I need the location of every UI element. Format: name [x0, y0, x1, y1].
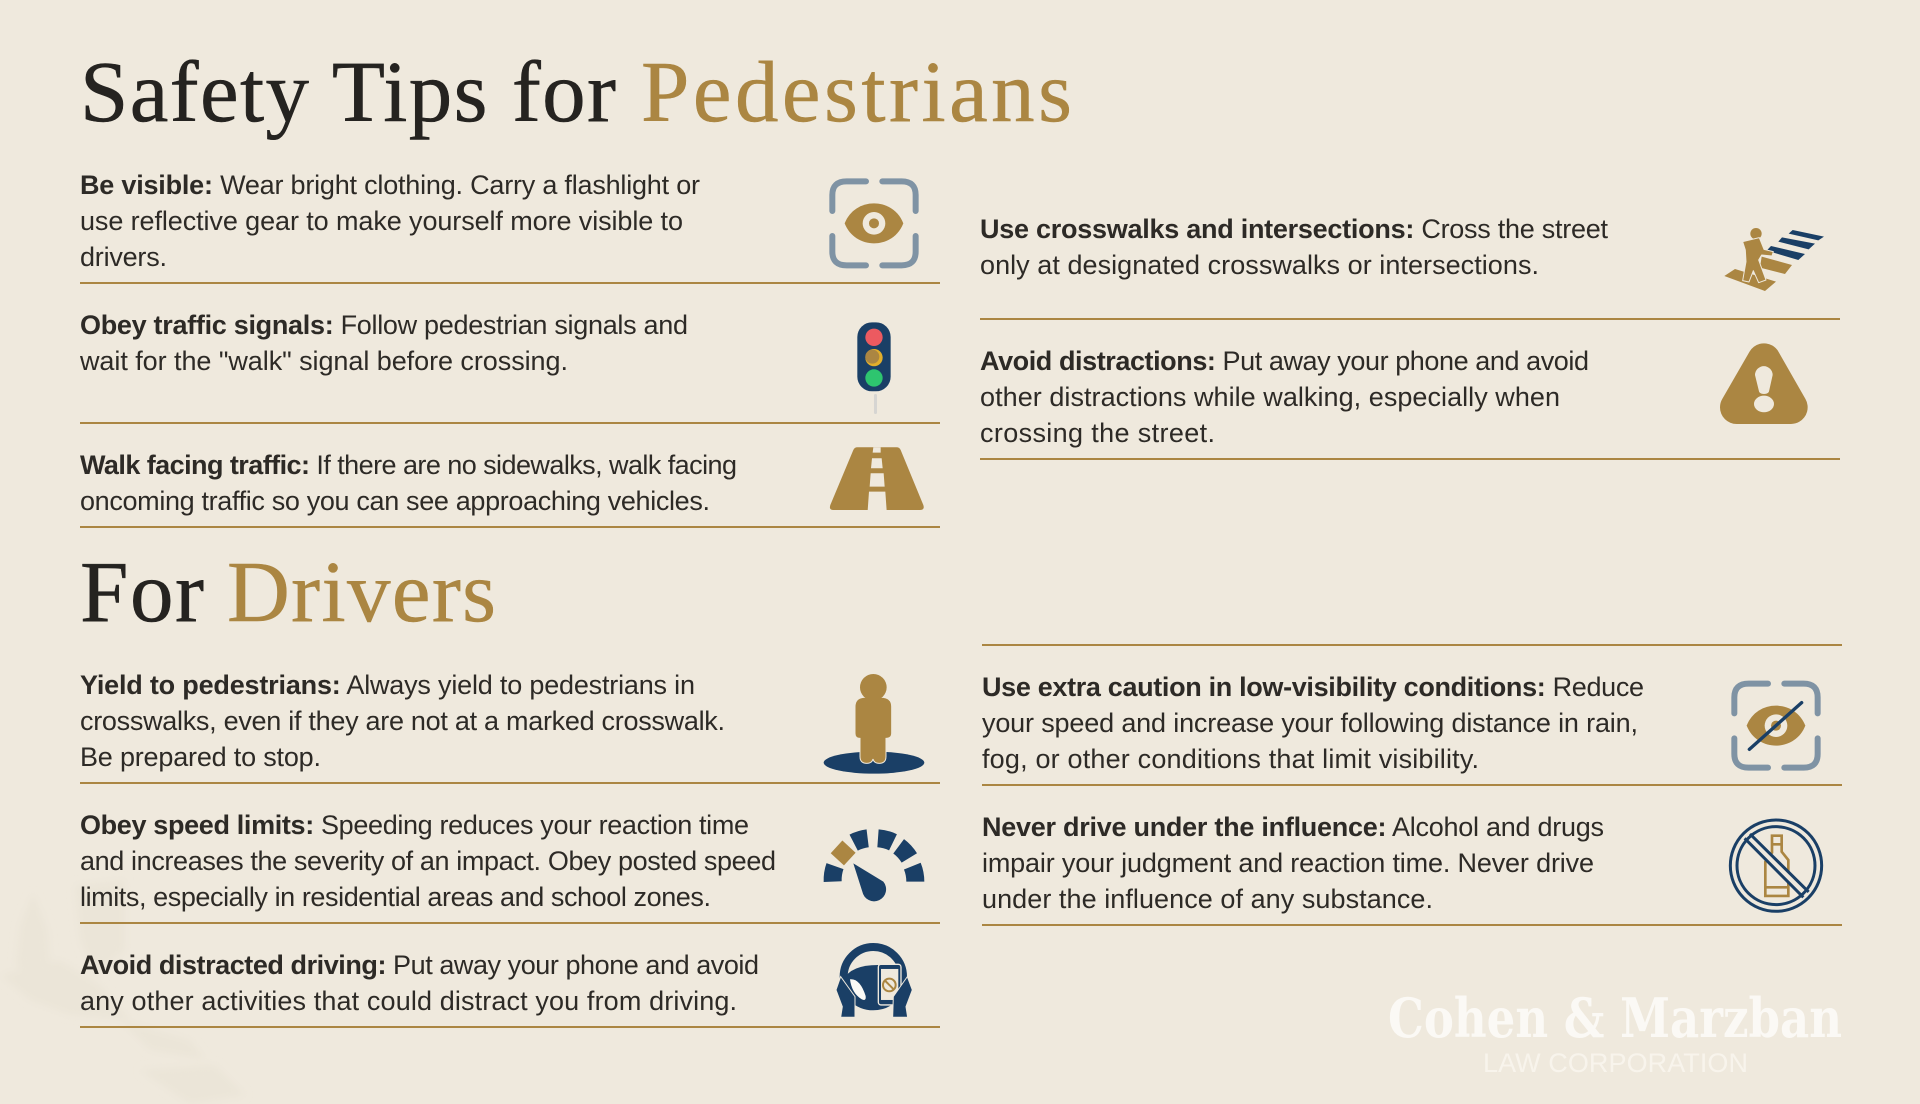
panel: avoid distracted driving: Avoid distracted driving: Put away your phone and avoid	[80, 950, 759, 980]
panel: never drive under the influence: under the influence of any substance.	[982, 884, 1433, 914]
panel: use crosswalks: only at designated crosswalks or intersections.	[980, 250, 1539, 280]
panel: walk facing traffic: oncoming traffic so you can see approaching vehicles.	[80, 486, 710, 516]
icon: crossed-out eye	[1734, 684, 1818, 768]
icon: eye in focus frame	[832, 181, 916, 265]
panel: obey speed limits: Obey speed limits: Speeding reduces your reaction time	[80, 810, 749, 840]
icon: speedometer	[833, 838, 915, 901]
icon: road	[830, 447, 924, 511]
icon: no alcohol sign	[1730, 820, 1822, 911]
logo: Cohen and Marzban Law Corporation: Cohen & Marzban	[1388, 986, 1842, 1050]
panel: low-visibility conditions: your speed and increase your following distance in rain,	[982, 708, 1638, 738]
panel: low-visibility conditions: fog, or other conditions that limit visibility.	[982, 744, 1479, 774]
panel: never drive under the influence: Never drive under the influence: Alcohol and drugs	[982, 812, 1604, 842]
panel: be visible: drivers.	[80, 242, 167, 272]
panel: yield to pedestrians: crosswalks, even if they are not at a marked crosswalk.	[80, 706, 725, 736]
icon: steering wheel with phone	[836, 947, 912, 1017]
logo: Cohen and Marzban Law Corporation	[1388, 986, 1842, 1078]
panel: never drive under the influence	[982, 812, 1842, 925]
panel: walk facing traffic	[80, 447, 940, 527]
panel: avoid distracted driving: any other activities that could distract you from driving.	[80, 986, 737, 1016]
panel: obey traffic signals: Obey traffic signals: Follow pedestrian signals and	[80, 310, 688, 340]
icon: pedestrian on crosswalk	[1724, 228, 1824, 291]
panel: yield to pedestrians	[80, 670, 940, 783]
icon: warning triangle	[1737, 360, 1791, 412]
watermark: faint tree and hillside	[0, 880, 245, 1104]
panel: avoid distractions: Avoid distractions: Put away your phone and avoid	[980, 346, 1589, 376]
panel: be visible: Be visible: Wear bright clothing. Carry a flashlight or	[80, 170, 700, 200]
panel: obey speed limits: and increases the severity of an impact. Obey posted speed	[80, 846, 776, 876]
heading: For Drivers	[80, 543, 496, 640]
icon: person standing	[824, 674, 924, 774]
panel: avoid distractions: crossing the street.	[980, 418, 1215, 448]
panel: avoid distracted driving	[80, 947, 940, 1027]
panel: be visible	[80, 170, 940, 283]
title: Safety Tips for Pedestrians	[80, 43, 1072, 140]
panel: low-visibility conditions: Use extra caution in low-visibility conditions: Reduce	[982, 672, 1644, 702]
panel: obey traffic signals: wait for the "walk" signal before crossing.	[79, 346, 568, 376]
title: Safety Tips for Pedestrians: Safety Tips for	[80, 43, 616, 140]
heading: For Drivers: Drivers	[227, 543, 496, 640]
panel: yield to pedestrians: Yield to pedestrians: Always yield to pedestrians in	[80, 670, 695, 700]
logo: Cohen and Marzban Law Corporation: LAW CORPORATION	[1483, 1048, 1748, 1078]
panel: yield to pedestrians: Be prepared to stop.	[80, 742, 321, 772]
panel: obey speed limits	[80, 810, 940, 923]
panel: use crosswalks	[980, 214, 1840, 319]
heading: For Drivers: For	[80, 543, 204, 640]
panel: low-visibility conditions	[982, 645, 1842, 785]
panel: never drive under the influence: impair your judgment and reaction time. Never drive	[982, 848, 1594, 878]
panel: be visible: use reflective gear to make yourself more visible to	[80, 206, 683, 236]
title: Safety Tips for Pedestrians: Pedestrians	[641, 43, 1072, 140]
panel: obey speed limits: limits, especially in residential areas and school zones.	[80, 882, 711, 912]
panel: obey traffic signals	[79, 310, 940, 423]
panel: walk facing traffic: Walk facing traffic: If there are no sidewalks, walk facing	[80, 450, 737, 480]
panel: use crosswalks: Use crosswalks and intersections: Cross the street	[980, 214, 1608, 244]
panel: avoid distractions: other distractions while walking, especially when	[980, 382, 1560, 412]
panel: avoid distractions	[980, 346, 1840, 459]
icon: traffic light	[857, 322, 891, 414]
